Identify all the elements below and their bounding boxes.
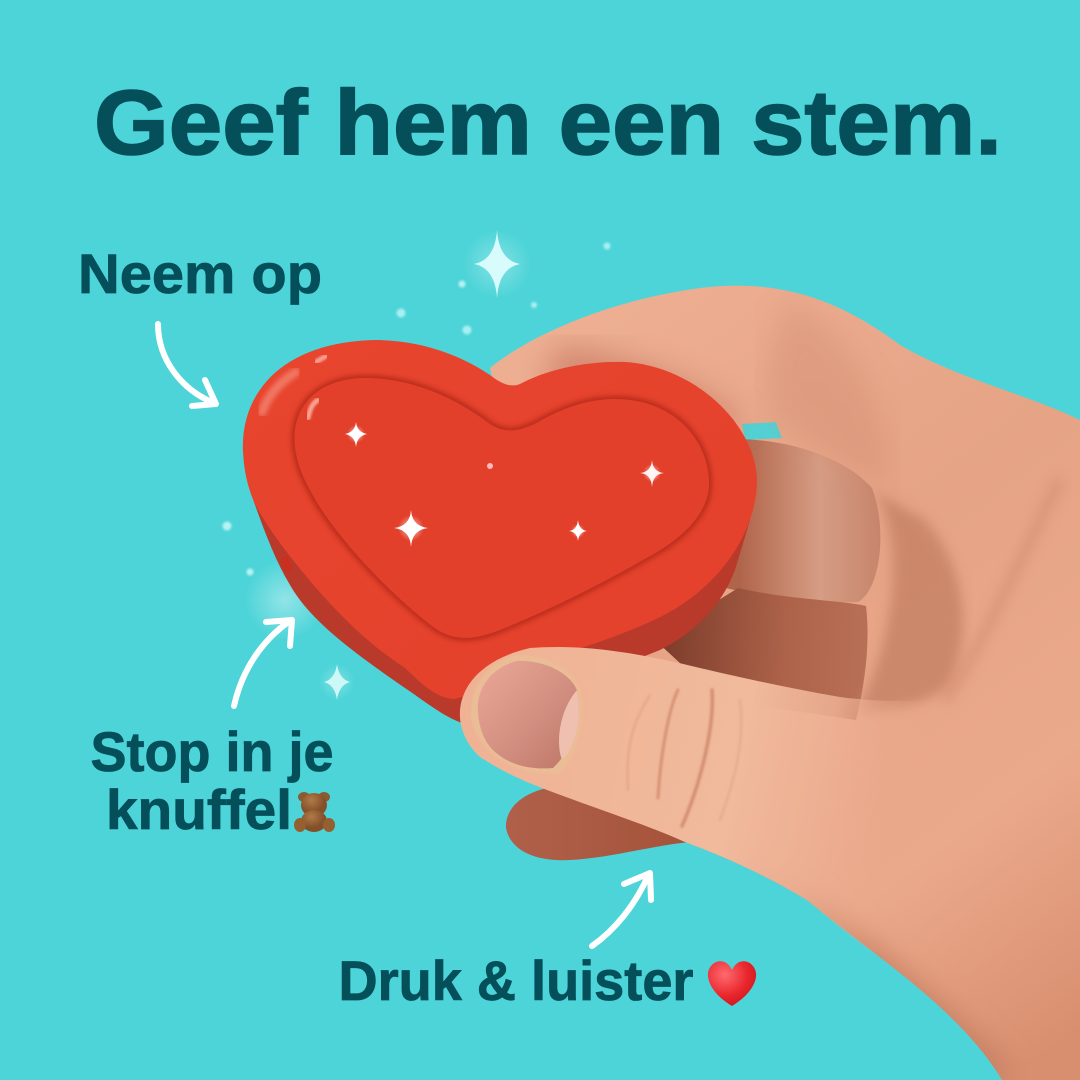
title: Geef hem een stem. [94,72,1002,174]
knuckle creases [627,690,741,826]
inner button groove [295,378,709,638]
hand shading [540,300,1060,1080]
index finger underside shadow [540,345,745,450]
back of hand and index finger [490,286,1080,1080]
label: Neem op: Neem op [78,242,322,305]
hand [490,286,1080,1080]
sparkles around heart [222,230,610,700]
small side button [280,555,293,573]
palm fold [856,490,963,712]
thumb nail border [471,655,582,773]
gap between index and middle finger [742,422,782,440]
glint on button [308,400,318,418]
heart device [243,340,757,726]
icon: red heart [708,961,756,1006]
middle finger [700,439,880,602]
heart body [243,340,757,699]
lower finger behind thumb [506,788,690,860]
knuckle crease [763,314,878,468]
sparkles on button [345,422,664,547]
icon: teddy bear [294,792,335,832]
label: Druk & luister: Druk & luister [338,949,694,1012]
arrow: Neem op to heart [158,324,216,406]
thumbnail [478,661,579,768]
label: Stop in je knuffel: Stop in je [90,720,334,783]
label: Stop in je knuffel [90,720,334,841]
arrow: to knuffel opening [234,620,292,706]
dark bottom edge of hand [690,842,1002,1080]
palm crease [945,480,1060,702]
ring finger [655,588,868,720]
inner button [295,378,709,638]
arrow: to press [592,873,651,946]
rim highlight [262,372,296,412]
heart side [254,502,750,726]
nail lunula [559,690,579,760]
label: Stop in je knuffel: knuffel [106,778,292,841]
thumb [460,647,1040,960]
